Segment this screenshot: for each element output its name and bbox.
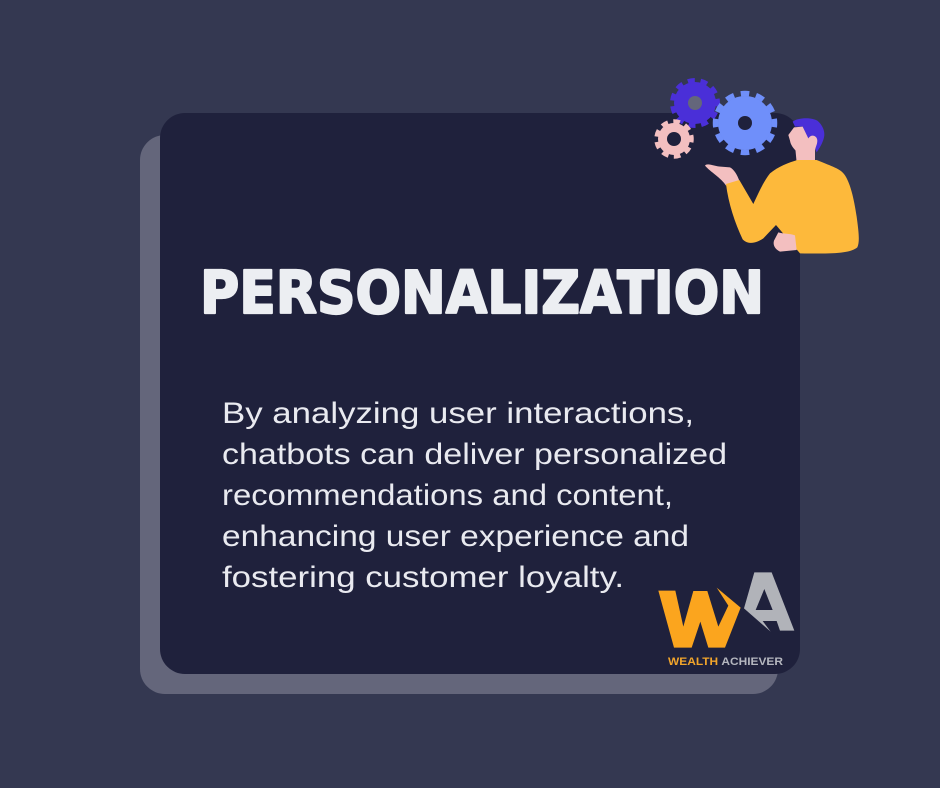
text block: description: fostering customer loyalty.: [222, 561, 624, 594]
text block: description: By analyzing user interactions,: [222, 397, 694, 430]
icon: Wealth Achiever logo: [658, 572, 794, 668]
text: logo wordmark: WEALTH ACHIEVER: [668, 656, 783, 668]
text block: description: enhancing user experience and: [222, 520, 689, 553]
icon: logo letter W: [658, 588, 741, 648]
icon: gears and person illustration: [656, 80, 859, 254]
panel: offset shadow card: [140, 135, 778, 694]
icon: pink gear: [656, 122, 692, 156]
text block: description: chatbots can deliver personalized: [222, 438, 727, 471]
icon: indigo gear: [672, 80, 718, 126]
icon: blue gear: [716, 94, 774, 152]
icon: person: [705, 118, 859, 254]
panel: main dark card: [160, 113, 800, 674]
text block: description: [222, 397, 727, 594]
text block: description: recommendations and content,: [222, 479, 673, 512]
icon: logo letter A: [744, 572, 794, 632]
title: PERSONALIZATION: [200, 258, 764, 327]
